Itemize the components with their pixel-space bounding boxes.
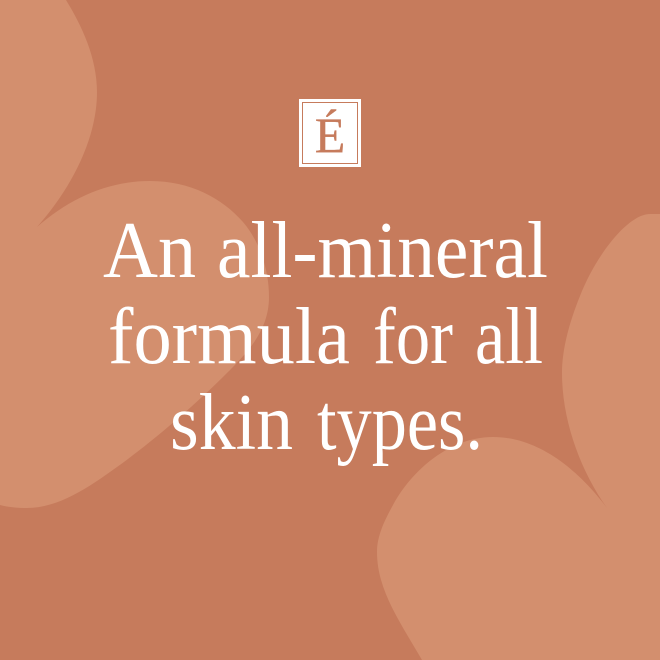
shape: top-left petal — [0, 0, 269, 508]
headline: formula — [108, 293, 350, 381]
headline: all-mineral — [217, 207, 548, 295]
headline: An — [103, 207, 196, 295]
logo — [299, 99, 361, 167]
headline: all — [475, 293, 543, 381]
headline: types. — [317, 379, 483, 467]
headline: for — [373, 293, 453, 381]
headline: skin — [170, 379, 293, 467]
logo: É — [315, 107, 345, 163]
headline — [103, 207, 548, 467]
shape: right petal — [377, 214, 660, 660]
